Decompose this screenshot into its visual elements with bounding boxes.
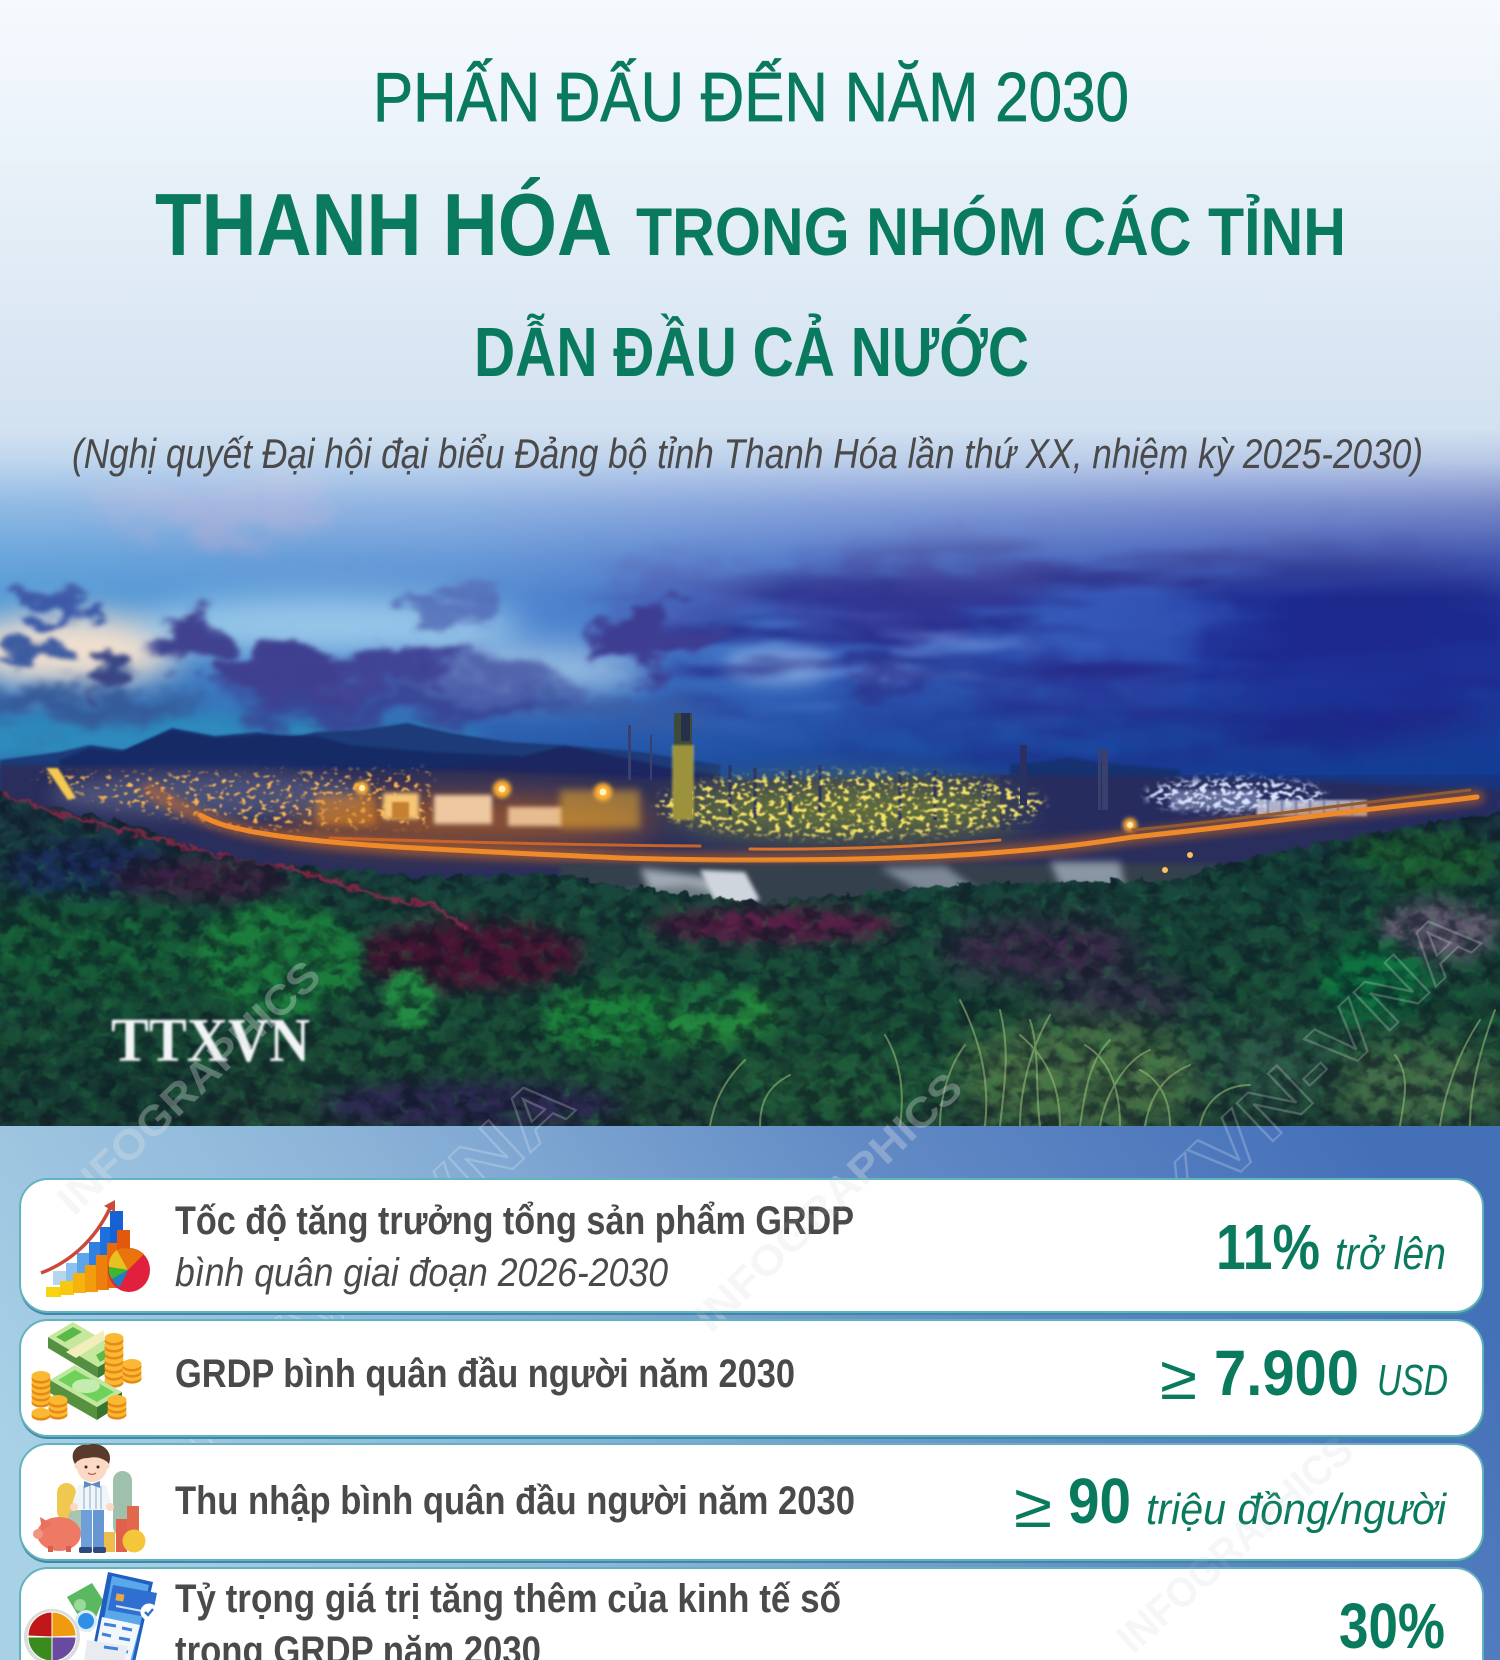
industrial zone base [0,762,1500,880]
panel background [0,1126,1500,1660]
construction site [560,852,1216,906]
value: 90 triệu đồng/người: 90 [1068,1465,1131,1537]
icon: man with piggy bank [33,1444,146,1553]
flare lights [46,768,1137,832]
label: GRDP per capita: GRDP bình quân đầu người năm 2030 [175,1352,795,1396]
label: income per capita: Thu nhập bình quân đầu người năm 2030 [175,1479,855,1523]
value: 7.900 USD: ≥ [1160,1344,1197,1413]
sky [0,440,1500,812]
title line 2 [155,175,1346,274]
city lights left [31,764,436,835]
watermarks over panel: TTXVN-VNA [1048,892,1495,1322]
faint watermarks across cards [48,951,1362,1660]
illuminated road [150,790,1477,860]
card 2: GRDP per capita [20,1320,1484,1439]
mountains [0,722,1181,790]
faint watermarks across cards: INFOGRAPHICS [1108,1426,1362,1660]
icon: digital payment [24,1572,158,1660]
photo: refinery at dusk [0,430,1500,1140]
refinery lights [652,745,1108,844]
card 4: digital economy share [20,1568,1483,1660]
foliage texture [0,790,1500,1140]
unit: trở lên: trở lên [1335,1228,1446,1279]
grass blades [710,1000,1495,1126]
distillation tower [628,713,694,820]
value: 90 triệu đồng/người: ≥ [1014,1472,1052,1541]
logo: TTXVN: TTXVN [111,1007,310,1075]
tank farm [1140,772,1368,818]
title line 1: PHẤN ĐẤU ĐẾN NĂM 2030 [373,58,1129,136]
fade from header into sky [0,430,1500,600]
header background [0,0,1500,560]
value: 90 triệu đồng/người [1014,1465,1447,1541]
value: 11%: 11% [1216,1211,1320,1283]
card 3: income per capita [20,1444,1484,1563]
value: 30%: 30% [1339,1590,1445,1660]
storm clouds [0,481,1500,739]
title line 2: TRONG NHÓM CÁC TỈNH [636,193,1346,270]
faint watermarks across cards: INFOGRAPHICS [48,951,330,1224]
hillside foreground [0,780,1500,1140]
hillside colour patches [0,830,1500,1130]
value: 90 triệu đồng/người: triệu đồng/người [1146,1485,1447,1534]
title line 2: THANH HÓA [155,175,612,274]
value: 7.900 USD [1160,1337,1448,1413]
watermarks over panel: TTXVN-VNA [144,1059,589,1482]
watermarks over panel: INFOGRAPHICS [685,1063,971,1340]
faint watermarks across cards: INFOGRAPHICS [685,1063,971,1340]
card 1: GRDP growth [20,1179,1484,1315]
label: growth: Tốc độ tăng trưởng tổng sản phẩm GRDP [175,1199,854,1243]
icon: money and coins [32,1322,142,1421]
sublabel: period: bình quân giai đoạn 2026-2030 [175,1251,668,1295]
value: 7.900 USD: 7.900 [1214,1337,1359,1409]
lit buildings [316,790,640,828]
label: digital economy share: Tỷ trọng giá trị tăng thêm của kinh tế số [175,1577,841,1621]
icon: growth chart [41,1200,150,1297]
value: 7.900 USD: USD [1377,1356,1448,1405]
watermarks over panel: INFOGRAPHICS [48,951,330,1224]
red dirt track [0,793,470,930]
watermarks over panel [48,892,1495,1482]
title line 3: DẪN ĐẦU CẢ NƯỚC [474,312,1029,391]
